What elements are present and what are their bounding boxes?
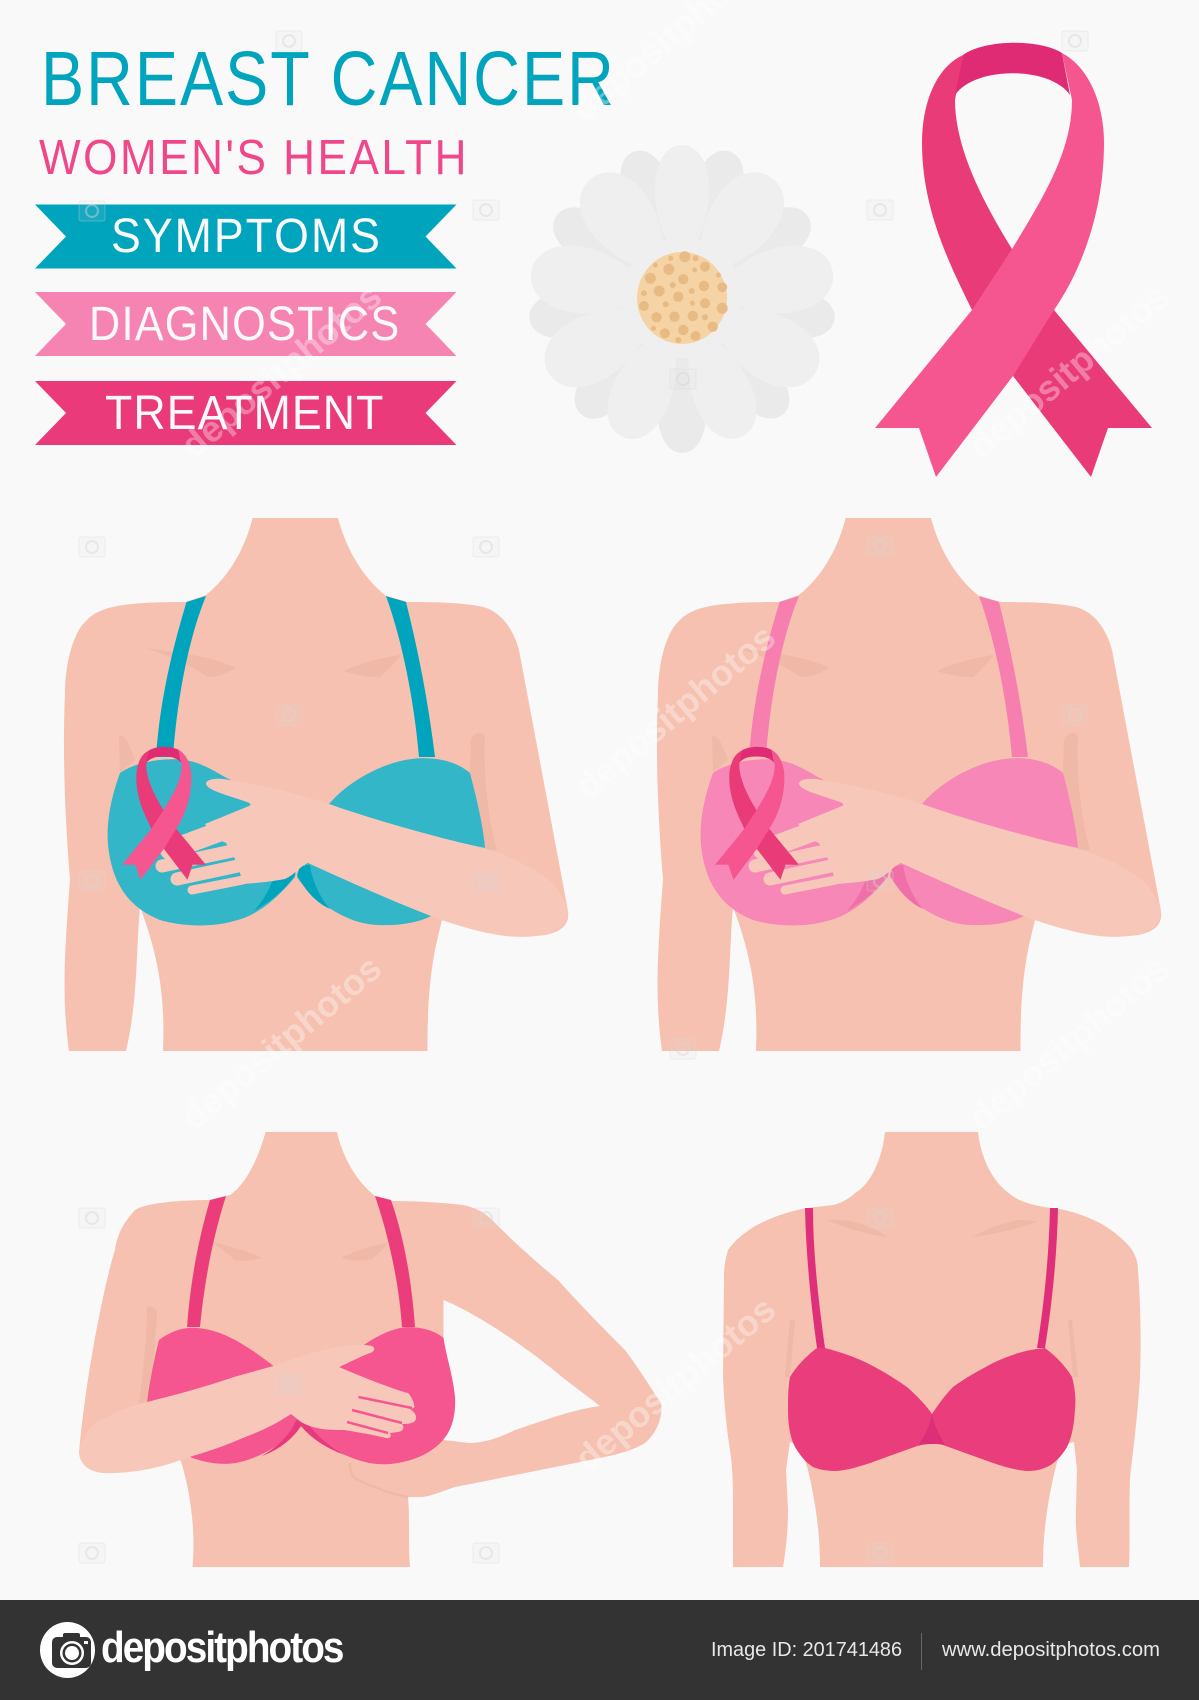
image id: Image ID: 201741486 bbox=[711, 1639, 902, 1661]
banner: treatment: TREATMENT bbox=[105, 386, 384, 439]
finger lines bbox=[347, 1397, 412, 1433]
cup shading bbox=[254, 865, 330, 911]
banner: diagnostics bbox=[35, 292, 456, 356]
logo wordmark: depositphotos bbox=[101, 1622, 343, 1672]
bra straps bbox=[749, 596, 1028, 757]
torso and arms bbox=[723, 1132, 1141, 1567]
subtitle: WOMEN'S HEALTH bbox=[39, 130, 469, 185]
figure: pink bra, diagnostics bbox=[657, 518, 1161, 1051]
banner: diagnostics: DIAGNOSTICS bbox=[89, 297, 400, 351]
banner: symptoms: SYMPTOMS bbox=[111, 209, 382, 262]
banner: treatment bbox=[35, 381, 456, 445]
icon: large pink awareness ribbon bbox=[875, 43, 1152, 477]
website url: www.depositphotos.com bbox=[941, 1639, 1160, 1661]
title: BREAST CANCER bbox=[41, 37, 616, 122]
bra cups bbox=[788, 1348, 1075, 1471]
watermarks: depositphotos bbox=[567, 616, 783, 807]
bra straps bbox=[187, 1196, 415, 1327]
bra straps bbox=[805, 1208, 1058, 1348]
watermarks: depositphotos bbox=[567, 1288, 783, 1479]
bra cups bbox=[701, 758, 1078, 925]
cup shading bbox=[262, 1418, 345, 1456]
bra straps bbox=[156, 596, 435, 757]
torso and raised arm bbox=[79, 1132, 661, 1567]
footer bar bbox=[0, 1600, 1199, 1700]
watermarks: depositphotos bbox=[961, 947, 1177, 1138]
figure: raised arm, hot pink bra, treatment bbox=[79, 1132, 661, 1567]
banner: symptoms bbox=[35, 204, 456, 268]
small pink ribbon bbox=[715, 747, 799, 880]
body shadows bbox=[785, 1220, 1078, 1377]
bra centre gore bbox=[918, 1414, 945, 1446]
hidden hand shadow bbox=[350, 1463, 408, 1497]
small pink ribbon bbox=[122, 747, 206, 880]
torso bbox=[64, 518, 568, 1051]
cup shading bbox=[847, 865, 923, 911]
body shadows bbox=[139, 1242, 388, 1404]
body shadows bbox=[119, 648, 497, 850]
arm and hand bbox=[79, 1345, 416, 1473]
watermarks: depositphotos bbox=[173, 275, 389, 466]
bra cups bbox=[147, 1327, 455, 1464]
arm and hand bbox=[755, 779, 1161, 937]
body shadows bbox=[712, 648, 1090, 850]
torso bbox=[657, 518, 1161, 1051]
figure: teal bra, symptoms bbox=[64, 518, 568, 1051]
bra cups bbox=[108, 758, 485, 925]
figure: front view, hot pink bra bbox=[723, 1132, 1141, 1567]
icon: daisy flower bbox=[526, 144, 838, 453]
arm and hand bbox=[162, 779, 568, 937]
watermarks: depositphotos bbox=[961, 275, 1177, 466]
watermarks: depositphotos bbox=[173, 947, 389, 1138]
icon: camera logo bbox=[40, 1622, 95, 1678]
